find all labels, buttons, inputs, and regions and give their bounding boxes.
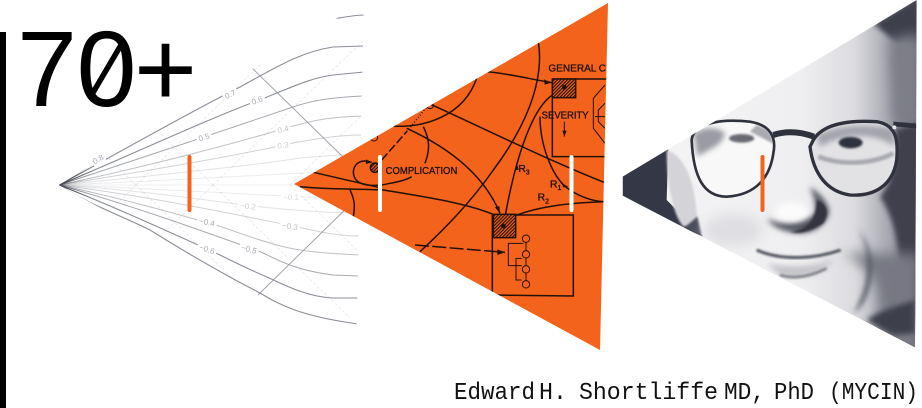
diagram drawing (300, 42, 607, 296)
diagram labels: 1 (557, 185, 561, 192)
chart contour labels: 0.6 (250, 94, 264, 107)
chart contour labels: 0.4 (277, 124, 290, 135)
caption: Shortliffe (579, 380, 718, 407)
diagram labels: R (550, 179, 557, 190)
diagram labels: R (518, 164, 526, 175)
portrait mouth (757, 250, 841, 277)
chart contour labels: −0.5 (240, 243, 258, 256)
chart axis lines (252, 68, 344, 296)
chart curves (59, 15, 364, 324)
caption: PhD (774, 380, 814, 407)
diagram labels: 3 (526, 170, 530, 177)
portrait nose (767, 187, 829, 233)
chart contour labels: 0.3 (277, 140, 290, 151)
chart contour labels: −0.3 (281, 221, 299, 232)
accent bar: portrait (760, 155, 764, 212)
diagram labels: R (538, 193, 545, 204)
panel: portrait photo triangle (620, 0, 920, 353)
chart contour labels: −0.4 (198, 216, 216, 229)
caption: Edward (454, 380, 535, 407)
diagram labels: COMPLICATION (386, 166, 457, 177)
chart contour labels: 0.8 (91, 152, 106, 166)
headline number: 70+ (17, 8, 197, 129)
chart contour labels (91, 88, 299, 256)
chart contour labels: 0.7 (223, 88, 238, 101)
diagram labels: SEVERITY (542, 111, 589, 122)
chart contour labels: −0.1 (283, 193, 299, 202)
panel: contour chart triangle (59, 15, 364, 324)
portrait hair and shadows (620, 0, 920, 353)
portrait skin base (667, 0, 917, 348)
chart grid lines (106, 40, 363, 318)
diagram labels: 2 (545, 198, 549, 205)
chart contour labels: 0.5 (198, 132, 211, 143)
accent bar: diagram right (570, 155, 574, 212)
caption: H. (539, 380, 567, 407)
accent bar: black left rule (0, 32, 6, 408)
chart contour labels: −0.2 (240, 201, 257, 212)
diagram labels: GENERAL CH (548, 64, 613, 75)
panel: orange flow diagram triangle (290, 0, 613, 352)
caption: MD, (724, 380, 765, 407)
chart contour labels: −0.6 (198, 243, 216, 256)
portrait glasses (692, 121, 917, 197)
diagram labels (386, 64, 613, 205)
caption (454, 380, 918, 407)
accent bar: chart (188, 155, 192, 212)
accent bar: diagram left (378, 155, 382, 212)
